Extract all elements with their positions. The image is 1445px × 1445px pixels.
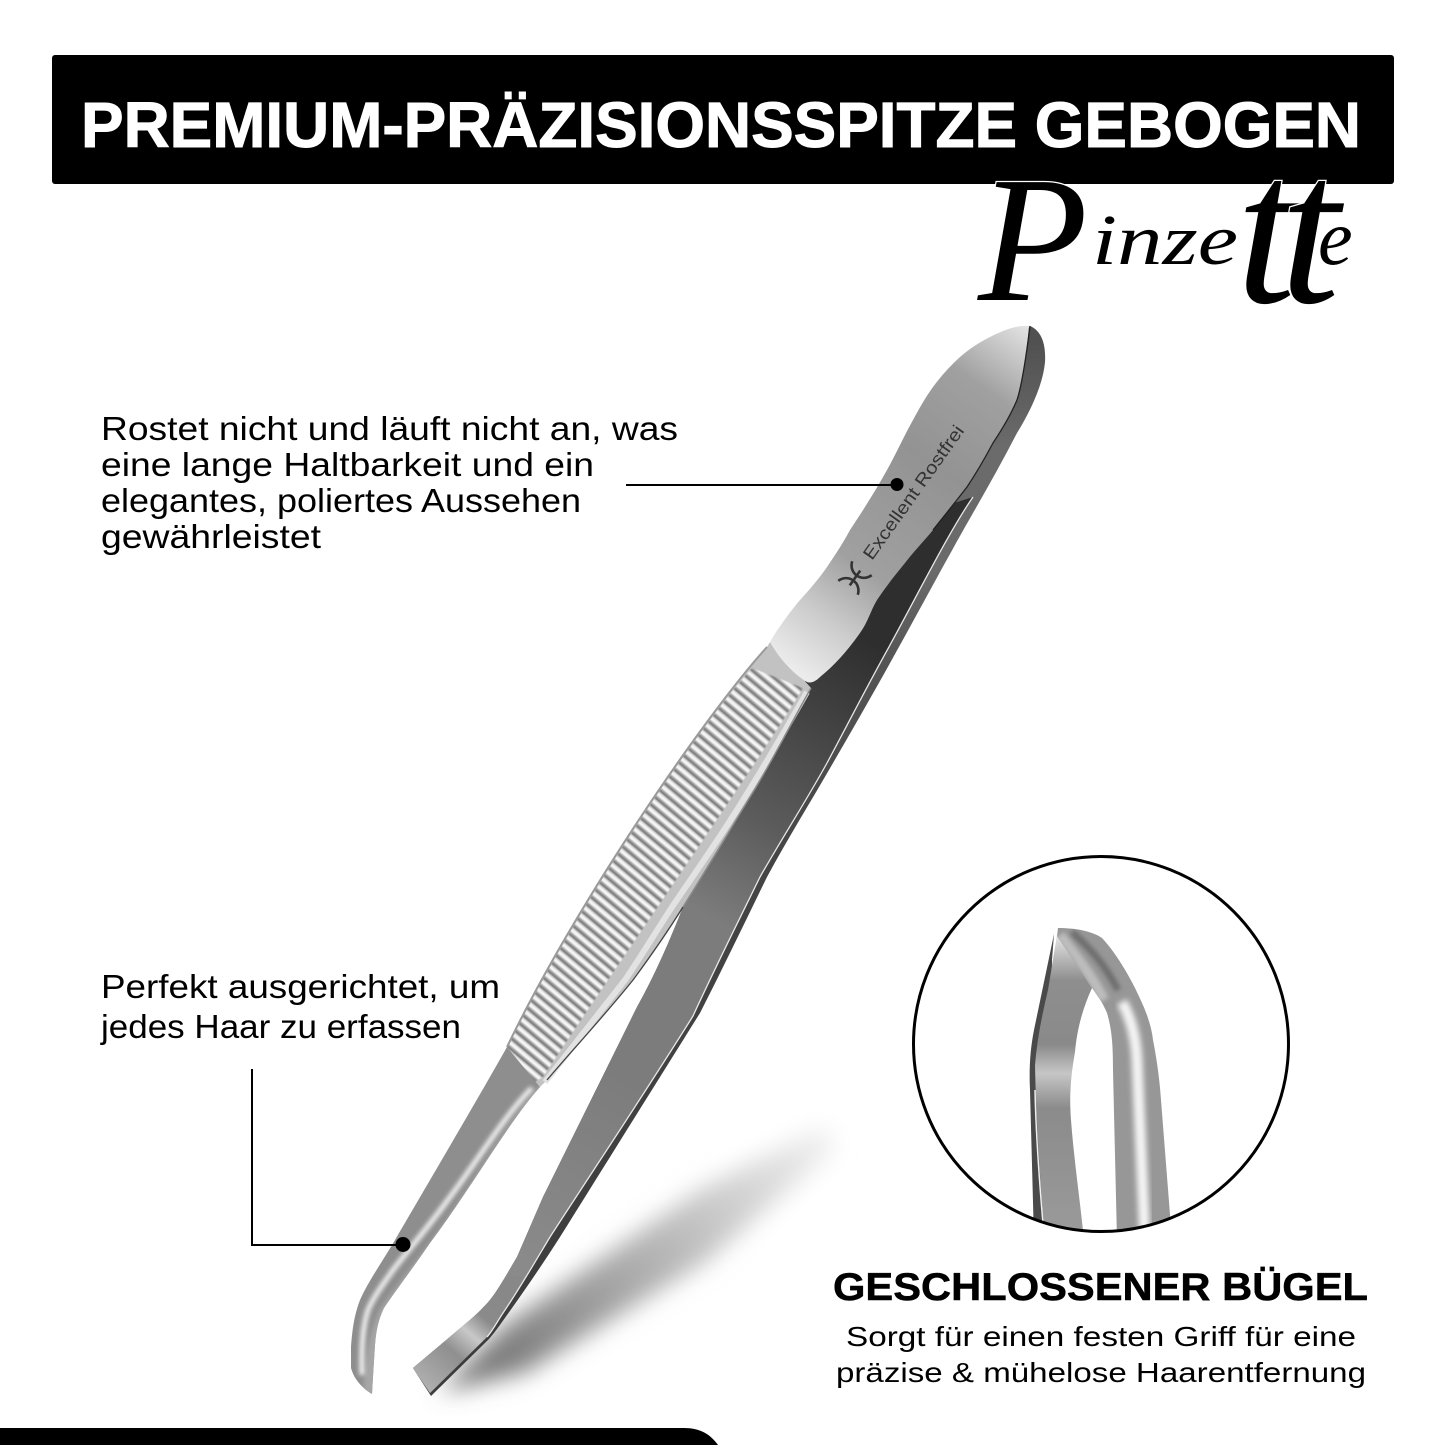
- engraved brand logo: [838, 561, 872, 595]
- inset left arm hairline: [1035, 1090, 1044, 1235]
- inset right arm: [1057, 928, 1172, 1240]
- leader dot: [890, 478, 904, 491]
- callout text: Rostet nicht und läuft nicht an, was: [101, 410, 678, 447]
- script subtitle: t: [1236, 110, 1301, 349]
- arm specular highlight: [362, 1088, 532, 1375]
- arm right band: [373, 1090, 550, 1396]
- lower arm: [413, 326, 1045, 1396]
- script subtitle: P: [977, 140, 1088, 339]
- inner rim highlight: [545, 692, 807, 1082]
- detail description: Sorgt für einen festen Griff für eine: [846, 1321, 1356, 1352]
- inner rim outer line: [683, 688, 811, 907]
- grip body: [507, 642, 811, 1087]
- callout text: elegantes, poliertes Aussehen: [101, 482, 581, 519]
- leader dot: [396, 1237, 410, 1252]
- inset bend light band: [1060, 935, 1104, 1000]
- spatula engraving text: Excellent Rostfrei: [859, 421, 968, 563]
- inner rim dark line: [547, 907, 683, 1080]
- inset bend dark band: [1072, 932, 1118, 990]
- inset circle border: [914, 856, 1288, 1232]
- spatula face: [770, 326, 1029, 683]
- lower flat section and curved tip: [351, 1047, 550, 1396]
- spatula black edge line: [933, 326, 1030, 530]
- bottom black bar: [0, 1428, 718, 1445]
- lower arm silhouette and back edge: [413, 326, 1045, 1396]
- lower arm hairline highlight: [487, 497, 973, 1337]
- script subtitle: t: [1280, 110, 1345, 349]
- grip serrations: [507, 668, 803, 1083]
- callout text: jedes Haar zu erfassen: [100, 1008, 461, 1045]
- tweezers product image: [351, 326, 1045, 1396]
- inset left arm: [1035, 935, 1092, 1240]
- upper arm: [351, 326, 1030, 1396]
- callout text: Perfekt ausgerichtet, um: [101, 968, 500, 1005]
- script subtitle: inze: [1092, 200, 1238, 280]
- lower tip bend: [413, 1275, 522, 1393]
- inset back edge: [1030, 934, 1054, 1240]
- callout: aligned tips: [100, 968, 509, 1252]
- callout text: eine lange Haltbarkeit und ein: [101, 446, 594, 483]
- leader line to tip: [252, 1069, 403, 1245]
- callout: rust-free material: [101, 410, 904, 555]
- grip left edge shade: [507, 647, 767, 1047]
- lower arm inner face: [413, 497, 973, 1393]
- cast shadow: [440, 1125, 835, 1392]
- detail inset circle: [913, 856, 1289, 1240]
- callout text: gewährleistet: [101, 518, 321, 555]
- inset specular highlight: [1122, 1002, 1145, 1240]
- leader line to spatula: [626, 484, 897, 486]
- detail description: präzise & mühelose Haarentfernung: [836, 1357, 1366, 1388]
- script subtitle: e: [1318, 194, 1353, 281]
- title text: PREMIUM-PRÄZISIONSSPITZE GEBOGEN: [81, 89, 1361, 161]
- title banner: [52, 55, 1394, 184]
- inset tweezer tip closeup: [1030, 928, 1172, 1240]
- detail heading: GESCHLOSSENER BÜGEL: [833, 1266, 1368, 1309]
